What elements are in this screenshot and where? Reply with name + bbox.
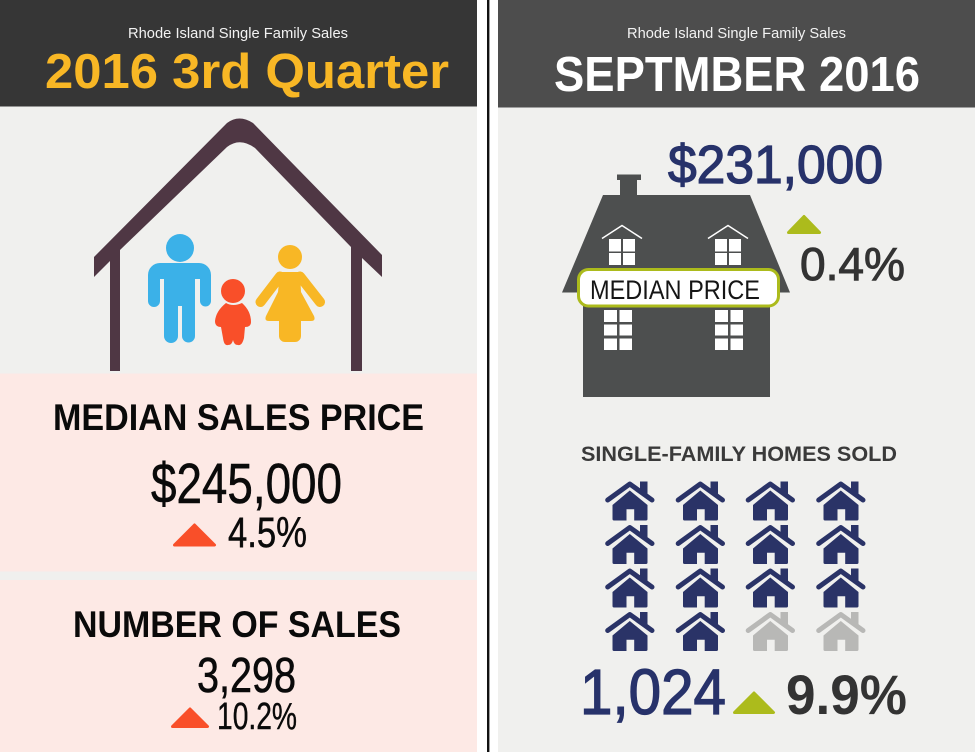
value: 1,024: 1,024: [580, 656, 726, 728]
change: 10.2%: 10.2%: [217, 696, 297, 738]
title: Septmber 2016: SEPTMBER 2016: [554, 48, 920, 102]
change: 9.9%: 9.9%: [786, 663, 907, 726]
icon: chimney: [617, 174, 641, 196]
change: 0.4%: 0.4%: [800, 238, 905, 290]
icon: house body: [562, 195, 790, 397]
panel: september 2016: [498, 0, 975, 752]
heading: median sales price: MEDIAN SALES PRICE: [53, 397, 424, 438]
heading: single-family homes sold: SINGLE-FAMILY HOMES SOLD: [581, 443, 897, 466]
icon: house outline: [94, 118, 382, 371]
header band: month: [498, 0, 975, 108]
value: $231,000: $231,000: [668, 135, 883, 195]
panel: 2016 3rd quarter: [0, 0, 477, 752]
change: 4.5%: 4.5%: [228, 509, 307, 557]
subtitle: right: Rhode Island Single Family Sales: [627, 26, 846, 42]
value: $245,000: $245,000: [151, 452, 342, 516]
divider line between panels: [487, 0, 489, 752]
title: 2016 3rd Quarter: 2016 3rd Quarter: [45, 45, 449, 99]
icon: up triangle red: [174, 525, 214, 545]
icon: lower windows: [604, 310, 743, 350]
pictogram: homes sold: [608, 482, 863, 651]
panel: median sales price: [0, 374, 477, 572]
label: median price: MEDIAN PRICE: [590, 275, 760, 305]
icon: child: [215, 279, 251, 345]
panel: number of sales: [0, 580, 477, 752]
subtitle: left: Rhode Island Single Family Sales: [128, 26, 348, 42]
icon: up triangle green: [788, 216, 820, 232]
icon: up triangle green large: [734, 693, 774, 712]
value: 3,298: 3,298: [197, 649, 296, 703]
header band: quarter: [0, 0, 477, 106]
icon: father: [148, 234, 211, 343]
icon: up triangle red small: [172, 709, 208, 726]
icon: upper windows: [602, 226, 748, 265]
icon: house outline with family: [94, 118, 382, 371]
icon: dark house with median price label: [562, 174, 790, 397]
heading: number of sales: NUMBER OF SALES: [73, 604, 401, 645]
icon: mother: [260, 245, 320, 342]
